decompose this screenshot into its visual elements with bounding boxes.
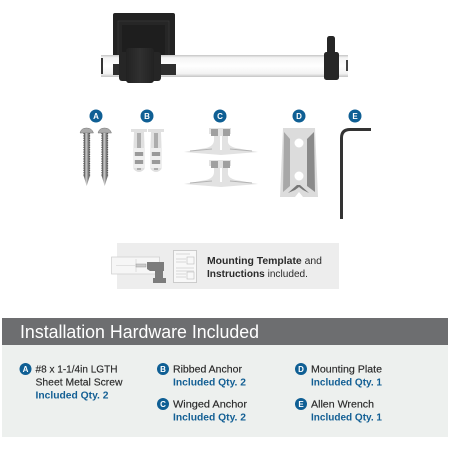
item B xyxy=(157,363,246,388)
item E: Allen Wrench xyxy=(311,400,374,410)
badge C xyxy=(214,110,226,122)
panel background xyxy=(2,345,448,437)
template text: Mounting Template and xyxy=(207,256,322,267)
icon: winged anchors xyxy=(184,128,258,187)
icon: mounting plate xyxy=(280,128,318,197)
item E: E xyxy=(298,400,304,409)
icon: ribbed anchors xyxy=(131,129,164,172)
icon: allen wrench xyxy=(342,130,371,219)
item C xyxy=(157,398,248,424)
heading: Installation Hardware Included xyxy=(20,322,259,342)
badge D: D xyxy=(296,112,302,121)
icon: drill on template xyxy=(112,257,166,283)
toilet paper holder product xyxy=(101,13,348,83)
badge E xyxy=(348,110,362,122)
header bar xyxy=(2,318,448,345)
item A: A xyxy=(23,365,29,374)
template text xyxy=(207,256,322,280)
badge D xyxy=(292,110,306,122)
item A: Included Qty. 2 xyxy=(36,390,109,402)
item A: #8 x 1-1/4in LGTH xyxy=(36,364,118,376)
icon: instructions sheet xyxy=(174,250,196,282)
hardware panel xyxy=(2,318,448,437)
badge B xyxy=(140,110,154,122)
item A: Sheet Metal Screw xyxy=(36,378,123,388)
item A xyxy=(20,363,123,402)
item B: B xyxy=(160,365,166,374)
item B: Ribbed Anchor xyxy=(173,364,243,376)
badge B: B xyxy=(144,112,150,121)
item C: C xyxy=(160,400,166,409)
template text: Instructions included. xyxy=(207,269,308,280)
badge C: C xyxy=(217,112,223,121)
item B: Included Qty. 2 xyxy=(173,378,246,388)
item D xyxy=(295,363,382,388)
item D: D xyxy=(298,365,304,374)
item C: Winged Anchor xyxy=(173,400,248,410)
badge E: E xyxy=(352,112,358,121)
item E: Included Qty. 1 xyxy=(311,412,382,424)
item D: Mounting Plate xyxy=(311,364,382,376)
item E xyxy=(295,398,382,424)
mounting template panel xyxy=(112,243,339,289)
icon: screws xyxy=(80,128,112,186)
badge A: A xyxy=(93,112,99,121)
badge A xyxy=(90,110,102,122)
item D: Included Qty. 1 xyxy=(311,378,382,388)
item C: Included Qty. 2 xyxy=(173,412,246,424)
